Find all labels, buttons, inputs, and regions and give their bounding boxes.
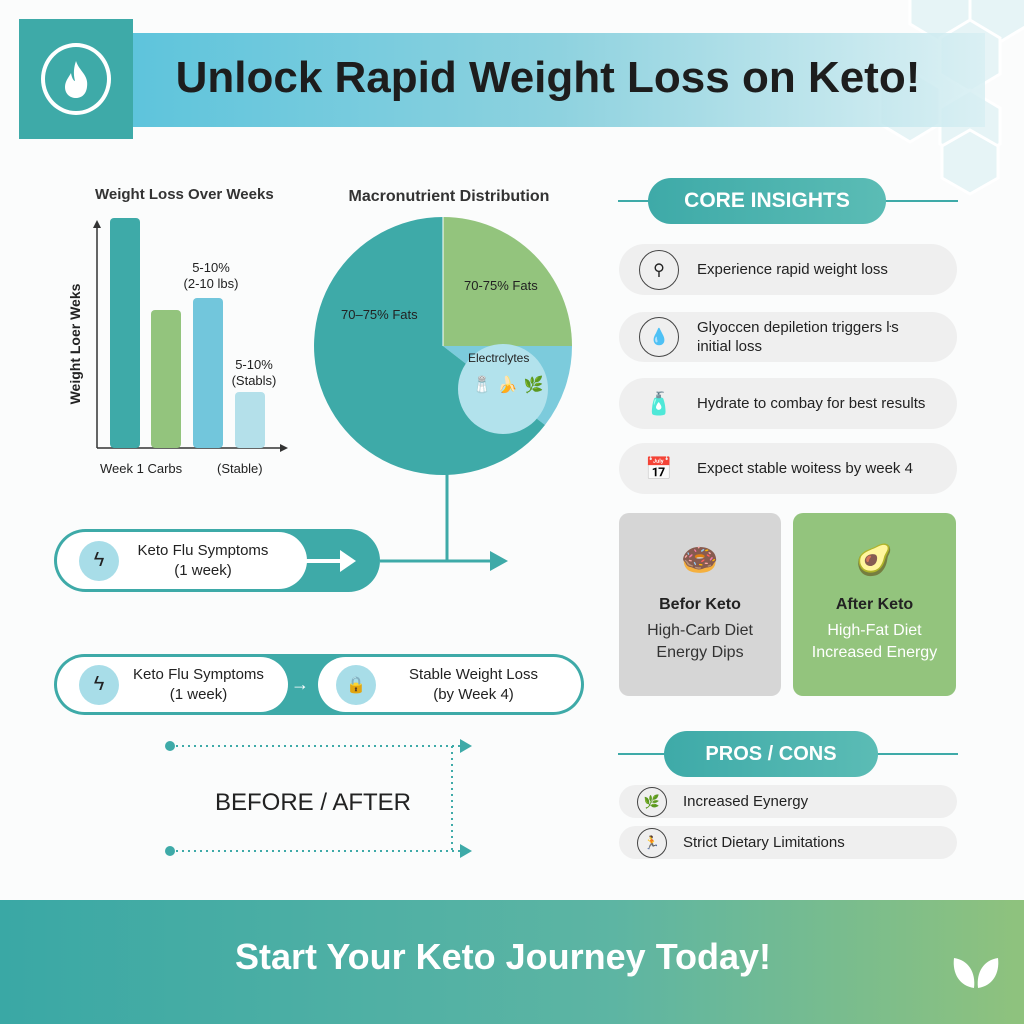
- pie chart: macronutrient distribution: Electrclytes: [468, 351, 529, 365]
- decorative hexagons: [888, 0, 1024, 192]
- pie chart: macronutrient distribution: [314, 188, 572, 475]
- timeline 1: [54, 529, 380, 592]
- timeline 1: Keto Flu Symptoms: [138, 542, 268, 558]
- timeline 2: (1 week): [170, 686, 227, 702]
- insight 4: Expect stable woitess by week 4: [697, 460, 913, 477]
- bar chart: weight loss over weeks: Weight Loer Weks: [67, 284, 83, 404]
- bar chart: weight loss over weeks: (Stable): [217, 461, 263, 476]
- insight 1: [619, 244, 957, 295]
- timeline 2: (by Week 4): [433, 686, 514, 702]
- after keto card: High-Fat Diet: [827, 622, 922, 639]
- bar chart: weight loss over weeks: Week 1 Carbs: [100, 461, 182, 476]
- before keto card: 🍩: [681, 544, 719, 577]
- timeline 2: 🔒: [346, 676, 366, 694]
- bar chart: weight loss over weeks: 5-10%: [235, 357, 273, 372]
- pro item: 🌿: [644, 794, 660, 808]
- dotted before/after connector: [165, 739, 472, 858]
- icon: leaves: [954, 958, 998, 988]
- title: Unlock Rapid Weight Loss on Keto!: [176, 53, 920, 102]
- before keto card: Befor Keto: [659, 596, 741, 613]
- con item: Strict Dietary Limitations: [683, 834, 845, 851]
- pros/cons heading: PROS / CONS: [705, 742, 837, 764]
- timeline 2: [54, 654, 584, 715]
- core insights heading: CORE INSIGHTS: [684, 189, 850, 212]
- after keto card: [793, 513, 956, 696]
- insight 3: [619, 378, 957, 429]
- timeline 2: →: [291, 674, 309, 694]
- connector: pie to timeline: [380, 474, 508, 571]
- header icon: flame: [19, 19, 133, 139]
- timeline 2: ϟ: [94, 673, 104, 695]
- timeline 2: Keto Flu Symptoms: [133, 666, 264, 682]
- bar chart: weight loss over weeks: 5-10%: [192, 260, 230, 275]
- insight 4: 📅: [645, 456, 673, 480]
- pie chart: macronutrient distribution: 70–75% Fats: [341, 307, 418, 322]
- insight 2: [619, 312, 957, 362]
- bar chart: weight loss over weeks: Weight Loss Over Weeks: [95, 186, 274, 203]
- insight 3: 🧴: [645, 390, 673, 416]
- insight 2: Glyoccen depiletion triggers ŀs: [697, 319, 899, 336]
- before keto card: High-Carb Diet: [647, 622, 753, 639]
- after keto card: 🥑: [856, 544, 893, 577]
- insight 2: initial loss: [697, 338, 762, 355]
- insight 1: ⚲: [653, 262, 665, 278]
- con item: 🏃: [644, 834, 660, 850]
- pie chart: macronutrient distribution: Macronutrient Distribution: [349, 188, 549, 205]
- header banner: [133, 33, 985, 127]
- bar chart: weight loss over weeks: (Stabls): [232, 373, 276, 388]
- bar chart: weight loss over weeks: (2-10 lbs): [184, 276, 238, 291]
- timeline 1: ϟ: [94, 549, 104, 571]
- con item: [619, 826, 957, 859]
- before keto card: Energy Dips: [656, 644, 744, 661]
- before/after label: BEFORE / AFTER: [215, 789, 411, 816]
- timeline 1: (1 week): [174, 562, 232, 578]
- pie chart: macronutrient distribution: 70-75% Fats: [464, 278, 538, 293]
- footer: [0, 900, 1024, 1024]
- pie chart: macronutrient distribution: 🧂🍌🌿: [472, 377, 550, 394]
- insight 4: [619, 443, 957, 494]
- insight 2: 💧: [649, 328, 669, 346]
- after keto card: After Keto: [836, 596, 913, 613]
- insight 3: Hydrate to combay for best results: [697, 395, 925, 412]
- footer: Start Your Keto Journey Today!: [235, 936, 771, 977]
- pro item: [619, 785, 957, 818]
- timeline 2: Stable Weight Loss: [409, 666, 538, 682]
- before keto card: [619, 513, 781, 696]
- pro item: Increased Eynergy: [683, 793, 808, 810]
- bar chart: weight loss over weeks: [67, 186, 288, 476]
- after keto card: Increased Energy: [812, 644, 937, 661]
- insight 1: Experience rapid weight loss: [697, 261, 888, 278]
